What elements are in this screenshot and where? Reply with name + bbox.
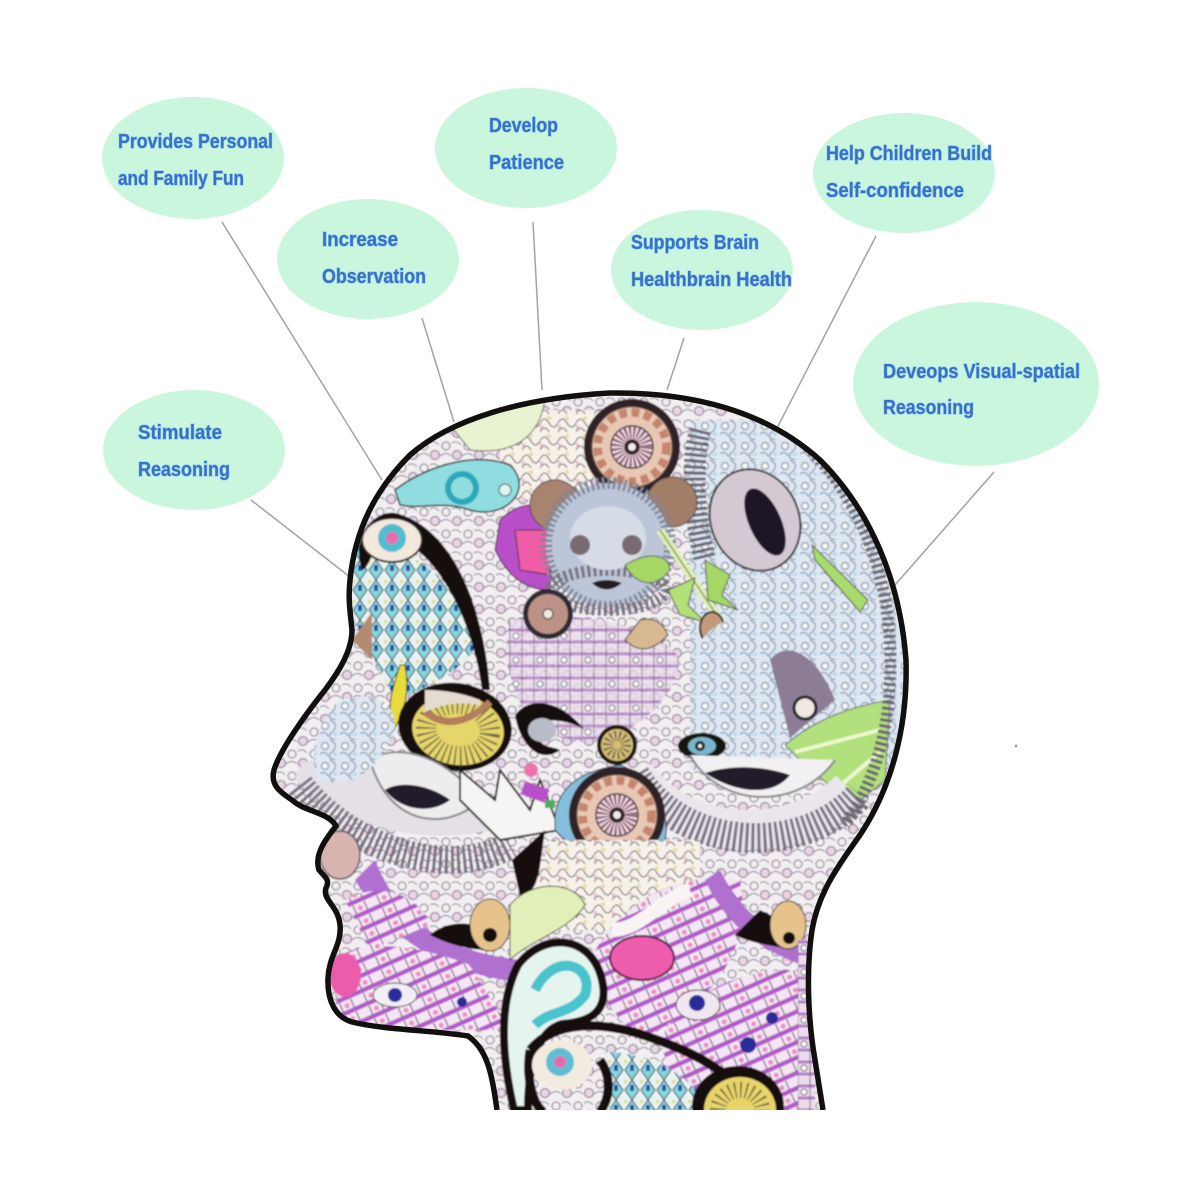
central purple lower fan with pink eye	[590, 878, 742, 1040]
top panda head	[530, 477, 697, 610]
yellow slanted marks	[390, 665, 407, 728]
bubble: Help Children Build Self-confidence	[813, 113, 995, 233]
white teeth-shaped shards	[460, 770, 560, 840]
dark upper right eye of panda	[708, 467, 802, 573]
left panda snout with fur	[295, 696, 510, 860]
connector line: Stimulate Reasoning	[251, 500, 350, 577]
lower rosette with blue ring	[554, 763, 668, 841]
top rosette	[584, 399, 680, 495]
bubble: Increase Observation: Increase	[322, 229, 398, 251]
large yellow eye	[396, 682, 513, 772]
pendant under panda	[625, 619, 668, 649]
connector line: Help Children Build Self-confidence	[776, 236, 876, 430]
connector line: Develop Patience	[533, 222, 542, 390]
bubble: Increase Observation	[277, 199, 459, 319]
top-left cream leaf	[450, 398, 545, 451]
blue eye	[678, 733, 726, 759]
bubble: Develop Patience	[435, 88, 617, 208]
bubble: Provides Personal and Family Fun	[102, 97, 284, 219]
lower teal paisley with thin black border	[504, 886, 604, 1110]
connector line: Supports Brain Health	[667, 338, 684, 390]
white mask below neck	[400, 1110, 900, 1200]
bamboo leaves top	[625, 530, 738, 644]
bubble: Develop Patience: Patience	[489, 152, 564, 174]
small yellow medallion	[597, 725, 637, 765]
fur strip upper right	[695, 430, 705, 560]
connector line: Increase Observation	[422, 318, 454, 422]
mouth-side medallion	[320, 831, 360, 879]
bubble: Stimulate Reasoning: Reasoning	[138, 459, 230, 481]
bubble: Increase Observation: Observation	[322, 266, 426, 288]
bubble: Help Children Build Self-confidence: Self-confidence	[826, 180, 964, 202]
magenta lower-left cheek fans	[329, 891, 510, 1030]
teal paisley	[395, 460, 519, 512]
head silhouette with mandala panda artwork	[260, 380, 920, 1146]
top band pattern	[500, 410, 600, 500]
pink fan left of panda	[495, 505, 555, 590]
brown nose-bridge mark	[352, 612, 372, 660]
bubble: Provides Personal and Family Fun: Provides Personal	[118, 131, 273, 153]
head outline	[273, 393, 906, 1110]
forehead feather pattern	[345, 540, 478, 700]
neck purple strips	[798, 940, 815, 1110]
dark wedge near centre	[512, 830, 545, 905]
bubble: Stimulate Reasoning: Stimulate	[138, 422, 222, 444]
bubble: Supports Brain Healthbrain Health: Supports Brain	[631, 232, 759, 254]
bubble: Supports Brain Healthbrain Health	[611, 210, 793, 330]
bottom yellow medallion	[691, 1065, 785, 1110]
connector line: Develops Visual-spatial Reasoning	[895, 472, 994, 585]
small brown rosette below panda	[523, 589, 573, 639]
bubble: Deveops Visual-spatial Reasoning: Deveops Visual-spatial	[883, 361, 1080, 383]
right panda snout with fur	[635, 755, 860, 838]
bubble: Supports Brain Healthbrain Health: Healthbrain Health	[631, 269, 792, 291]
upper right patterned region	[690, 420, 910, 770]
bubble: Deveops Visual-spatial Reasoning: Reasoning	[883, 397, 974, 419]
bubble: Provides Personal and Family Fun: and Family Fun	[118, 168, 244, 190]
purple band left	[355, 860, 520, 982]
bottom paisley	[529, 1026, 725, 1112]
small curl eye in centre	[515, 703, 585, 755]
central purple pattern	[506, 616, 680, 740]
bubble: Develop Patience: Develop	[489, 115, 558, 137]
small stray dot	[1015, 745, 1017, 747]
green bamboo leaf upper right	[812, 545, 868, 612]
bubble: Deveops Visual-spatial Reasoning	[853, 302, 1099, 466]
lower middle scalloped region	[520, 840, 700, 930]
pink and green blocks	[520, 763, 555, 808]
right lower fan with eyes	[660, 870, 812, 1110]
bubble: Help Children Build Self-confidence: Help Children Build	[826, 143, 992, 165]
right panda face	[702, 620, 891, 800]
bubble: Stimulate Reasoning	[103, 390, 285, 510]
inner rim right side	[790, 430, 890, 825]
left eye paisley with black curve	[359, 513, 490, 690]
connector line: Provides Personal and Family Fun	[222, 222, 382, 480]
